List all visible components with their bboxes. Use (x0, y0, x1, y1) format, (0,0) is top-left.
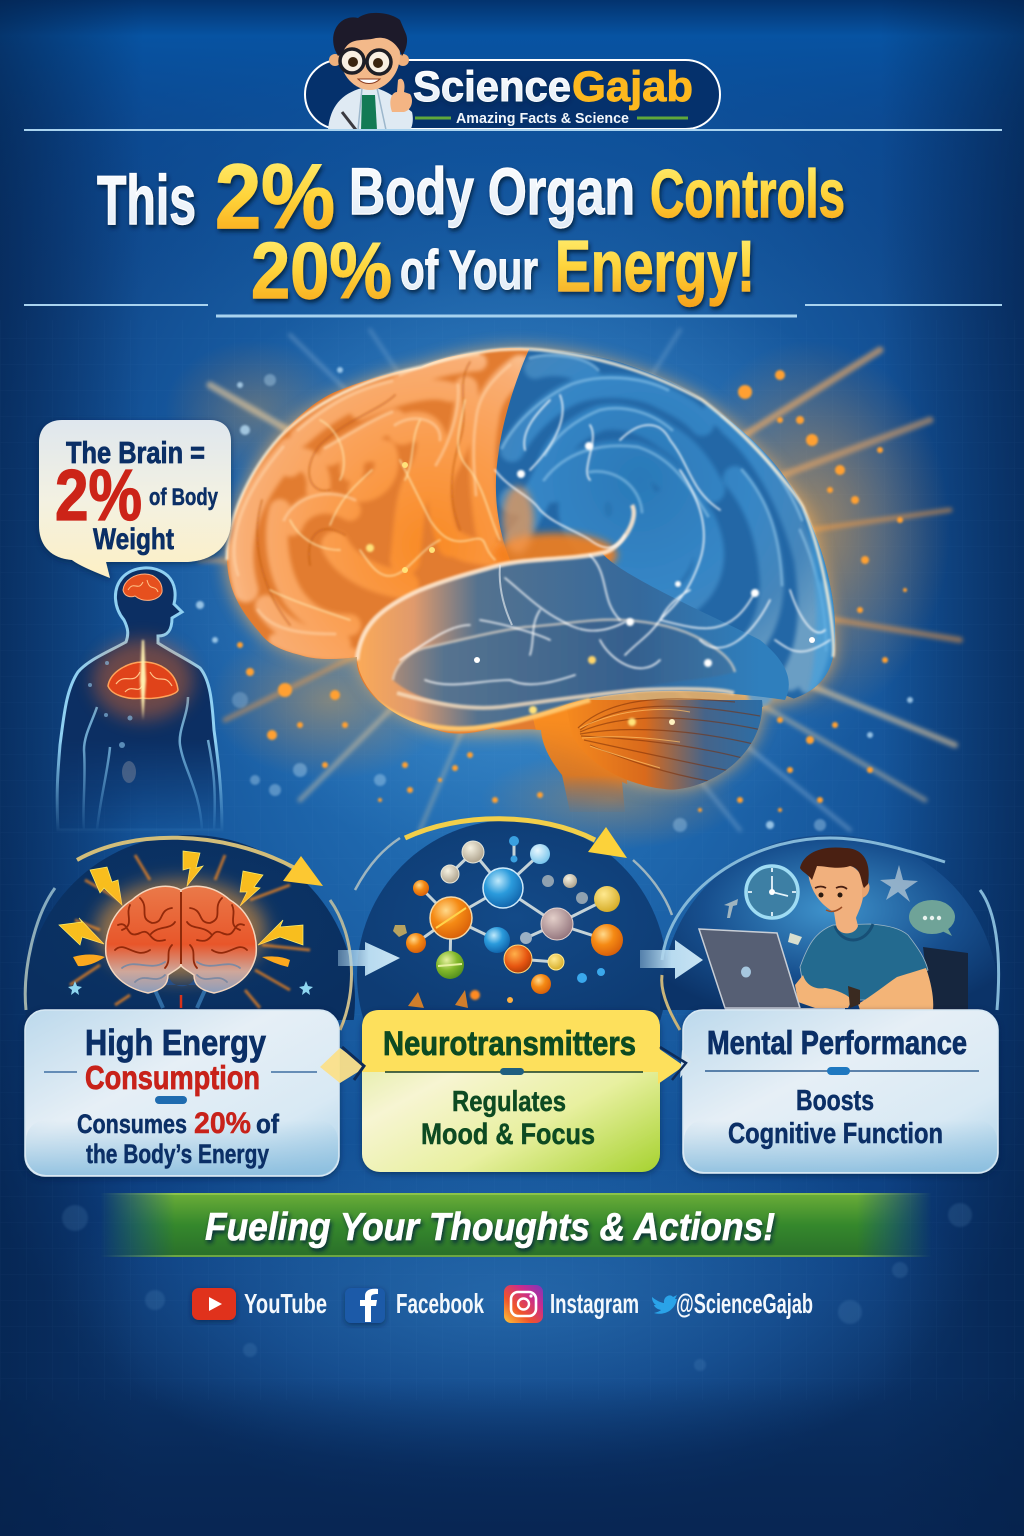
molecule network (393, 836, 623, 1008)
body text: 20% (194, 1107, 251, 1140)
panel 3 backdrop (660, 835, 994, 1010)
panel: mental performance card: Cognitive Function (728, 1118, 943, 1150)
panel 2 backdrop (350, 815, 680, 1020)
icon: YouTube (192, 1288, 236, 1320)
panel: high energy illustration (20, 830, 370, 1030)
brain: rim light (227, 349, 834, 657)
Facebook label: Facebook (396, 1288, 484, 1319)
laptop (699, 929, 845, 1012)
title line 2 (251, 226, 755, 315)
brain: neural sparks (270, 395, 830, 726)
panel: neurotransmitters card (362, 1010, 660, 1172)
human body silhouette (57, 568, 222, 830)
title line 1: Body Organ (349, 154, 635, 228)
banner (100, 1193, 932, 1257)
logo tagline: Amazing Facts & Science (456, 111, 629, 127)
icon: star (880, 865, 918, 902)
brain: orange gyri (241, 362, 520, 655)
brain: orange left hemisphere (220, 340, 540, 740)
brain: cerebellum (565, 699, 763, 790)
title line 2: 20% (251, 226, 392, 315)
energy bursts and bolts (59, 851, 313, 1008)
Instagram label: Instagram (550, 1288, 639, 1319)
logo (305, 13, 720, 130)
Twitter handle: @ScienceGajab (676, 1288, 813, 1319)
logo wordmark: Science (413, 63, 571, 111)
main brain illustration (220, 340, 850, 815)
body: spinal energy line (142, 590, 144, 740)
body: head brain (123, 574, 162, 600)
panel 1 backdrop (20, 830, 370, 1020)
flow arrow 2 (640, 940, 703, 979)
energy sunburst (130, 260, 960, 860)
arc arrow 2 (405, 819, 627, 858)
person at laptop (795, 847, 933, 1010)
body text: Consumes (77, 1109, 187, 1139)
panel: high energy card (25, 1010, 339, 1176)
speech bubble: The Brain = (66, 435, 205, 470)
heading: high energy: High Energy (85, 1022, 266, 1063)
body text: Regulates (452, 1086, 566, 1118)
logo pill (305, 60, 720, 129)
title line 1 (97, 146, 845, 248)
body text: Boosts (796, 1085, 874, 1117)
icon: scientist mascot (328, 13, 413, 130)
title (97, 146, 845, 315)
icon: chat bubble (909, 900, 955, 936)
icon: clock (746, 866, 798, 918)
header divider (24, 129, 1002, 131)
title line 2: of Your (400, 238, 538, 301)
chair (923, 947, 968, 1010)
panel: mental performance card (683, 1010, 998, 1173)
brain: orange folds (257, 362, 470, 625)
speech bubble (39, 420, 231, 578)
icon: Facebook (345, 1288, 385, 1323)
body text: the Body’s Energy (86, 1139, 269, 1169)
icon: Twitter bird (652, 1295, 677, 1314)
title line 1: 2% (215, 146, 335, 248)
panel: neurotransmitter illustration (350, 815, 680, 1020)
panel: mental performance illustration (655, 830, 1005, 1030)
panel 1 rim (25, 888, 351, 1030)
heading: mental performance: Mental Performance (707, 1024, 967, 1061)
icon: Instagram (504, 1285, 543, 1323)
panel: neurotransmitters card: Mood & Focus (421, 1118, 595, 1151)
speech bubble: of Body (149, 484, 218, 511)
glowing particles (196, 367, 913, 832)
social links (192, 1285, 813, 1323)
arc arrow 1 (77, 838, 323, 886)
body: glowing chest (93, 640, 193, 720)
panel 3 rim (662, 838, 999, 1010)
YouTube label: YouTube (244, 1288, 327, 1319)
title line 1: Controls (650, 156, 845, 232)
speech bubble: 2% (55, 456, 142, 536)
brain: blue right hemisphere (496, 348, 835, 698)
logo wordmark accent: Gajab (572, 63, 693, 111)
body text: of (256, 1109, 280, 1139)
speech bubble: Weight (93, 523, 174, 556)
title line 1: This (97, 161, 196, 239)
heading: neurotransmitters: Neurotransmitters (383, 1025, 636, 1063)
brain: temporal lobe (357, 553, 789, 731)
panel 2 rim (355, 838, 672, 915)
heading: consumption: Consumption (85, 1059, 260, 1096)
icon: small brain (96, 880, 266, 1008)
brain: blue gyri (512, 365, 824, 695)
chevron connector 2 (658, 1047, 692, 1084)
chevron connector 1 (320, 1047, 366, 1083)
banner text: Fueling Your Thoughts & Actions! (205, 1206, 775, 1249)
body text (77, 1107, 280, 1169)
title line 2: Energy! (555, 227, 755, 307)
brain: brainstem (534, 704, 628, 812)
flow arrow 1 (338, 942, 400, 976)
